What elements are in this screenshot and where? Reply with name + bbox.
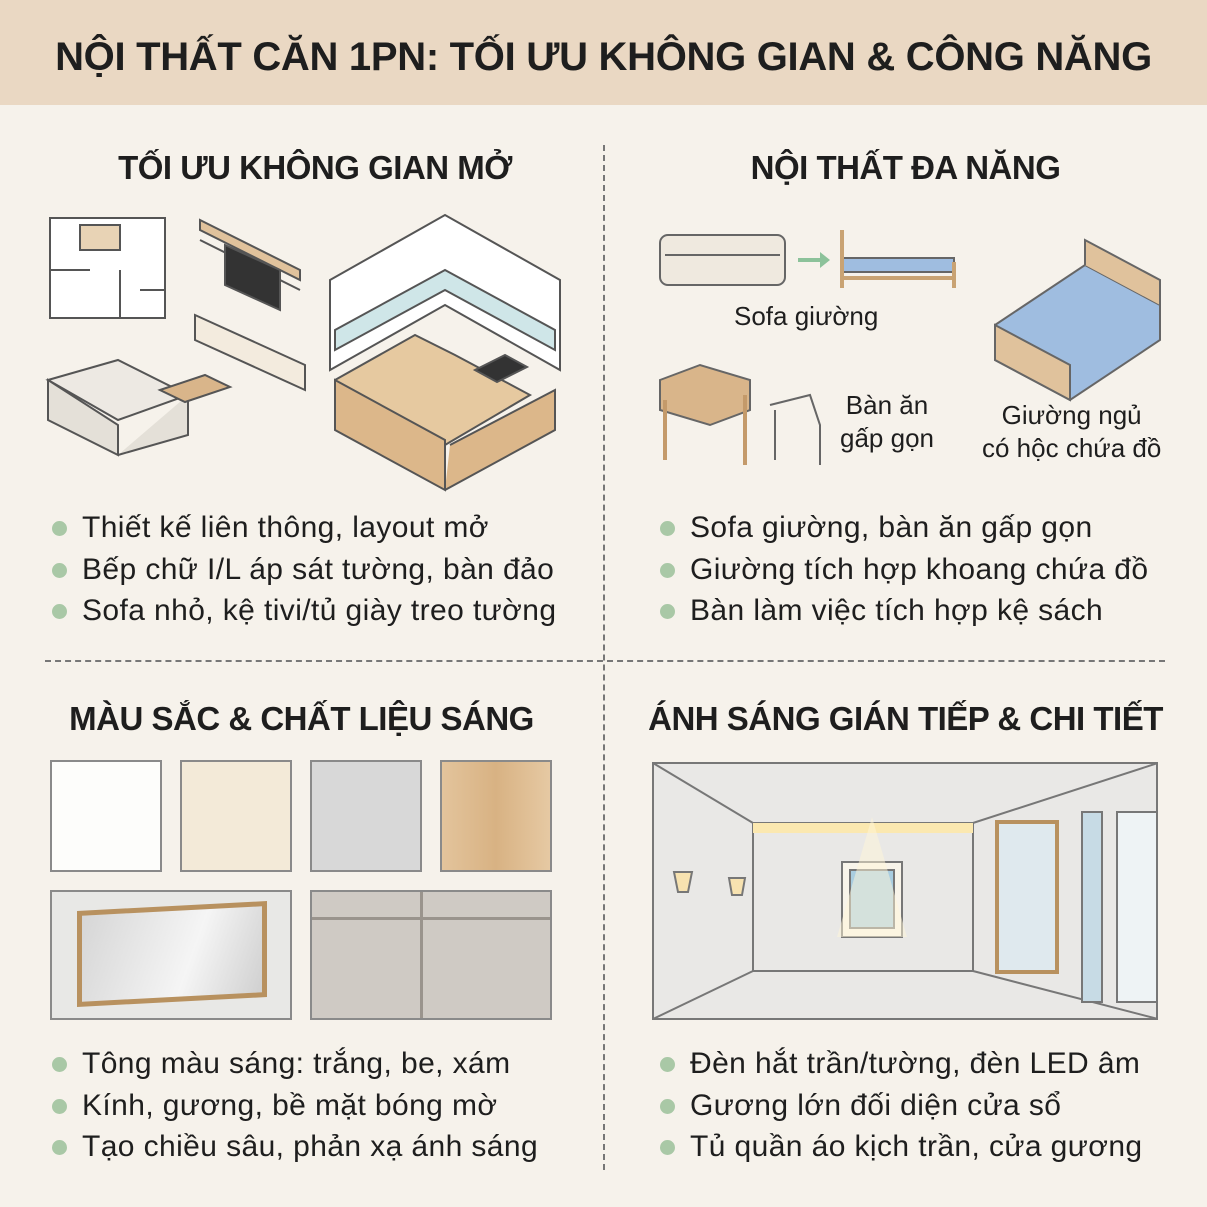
- bullets: Tông màu sáng: trắng, be, xám: [82, 1047, 510, 1080]
- bullets: Sofa nhỏ, kệ tivi/tủ giày treo tường: [82, 594, 556, 627]
- illustration: floorplan, living room, kitchen: [46, 214, 561, 492]
- swatches: [50, 760, 552, 1020]
- bullets: [660, 1047, 1142, 1163]
- panel: multifunction furniture: [659, 149, 1161, 627]
- panel: multifunction furniture: có hộc chứa đồ: [982, 433, 1161, 463]
- heading: ÁNH SÁNG GIÁN TIẾP & CHI TIẾT: [648, 700, 1163, 737]
- bullets: Giường tích hợp khoang chứa đồ: [690, 552, 1148, 586]
- bullets: Đèn hắt trần/tường, đèn LED âm: [690, 1047, 1140, 1080]
- bullets: [52, 1047, 538, 1163]
- panel: multifunction furniture: gấp gọn: [840, 423, 934, 453]
- illustration: [659, 230, 1161, 465]
- room illustration: [652, 762, 1158, 1020]
- panel: indirect lighting: [648, 700, 1164, 1163]
- heading: MÀU SẮC & CHẤT LIỆU SÁNG: [69, 700, 534, 737]
- bullets: Gương lớn đối diện cửa sổ: [690, 1088, 1061, 1122]
- panel: colors & materials: [50, 700, 552, 1163]
- bullets: Tạo chiều sâu, phản xạ ánh sáng: [82, 1130, 538, 1163]
- header band: [0, 0, 1207, 105]
- heading: NỘI THẤT ĐA NĂNG: [751, 149, 1060, 186]
- bullets: [52, 511, 556, 627]
- bullets: Tủ quần áo kịch trần, cửa gương: [690, 1130, 1142, 1163]
- labels: Sofa giường: [734, 301, 878, 331]
- dividers: [603, 145, 605, 1170]
- panel: multifunction furniture: Giường ngủ: [1002, 400, 1142, 430]
- bullets: Sofa giường, bàn ăn gấp gọn: [690, 511, 1093, 544]
- bullets: [660, 511, 1148, 627]
- bullets: Bàn làm việc tích hợp kệ sách: [690, 594, 1103, 627]
- bullets: Bếp chữ I/L áp sát tường, bàn đảo: [82, 552, 554, 586]
- panel: open space: [46, 149, 561, 627]
- bullets: Kính, gương, bề mặt bóng mờ: [82, 1088, 497, 1122]
- title: NỘI THẤT CĂN 1PN: TỐI ƯU KHÔNG GIAN & CÔNG NĂNG: [55, 35, 1152, 79]
- panel: multifunction furniture: Bàn ăn: [846, 390, 928, 420]
- heading: TỐI ƯU KHÔNG GIAN MỞ: [118, 149, 512, 186]
- bullets: Thiết kế liên thông, layout mở: [82, 511, 489, 544]
